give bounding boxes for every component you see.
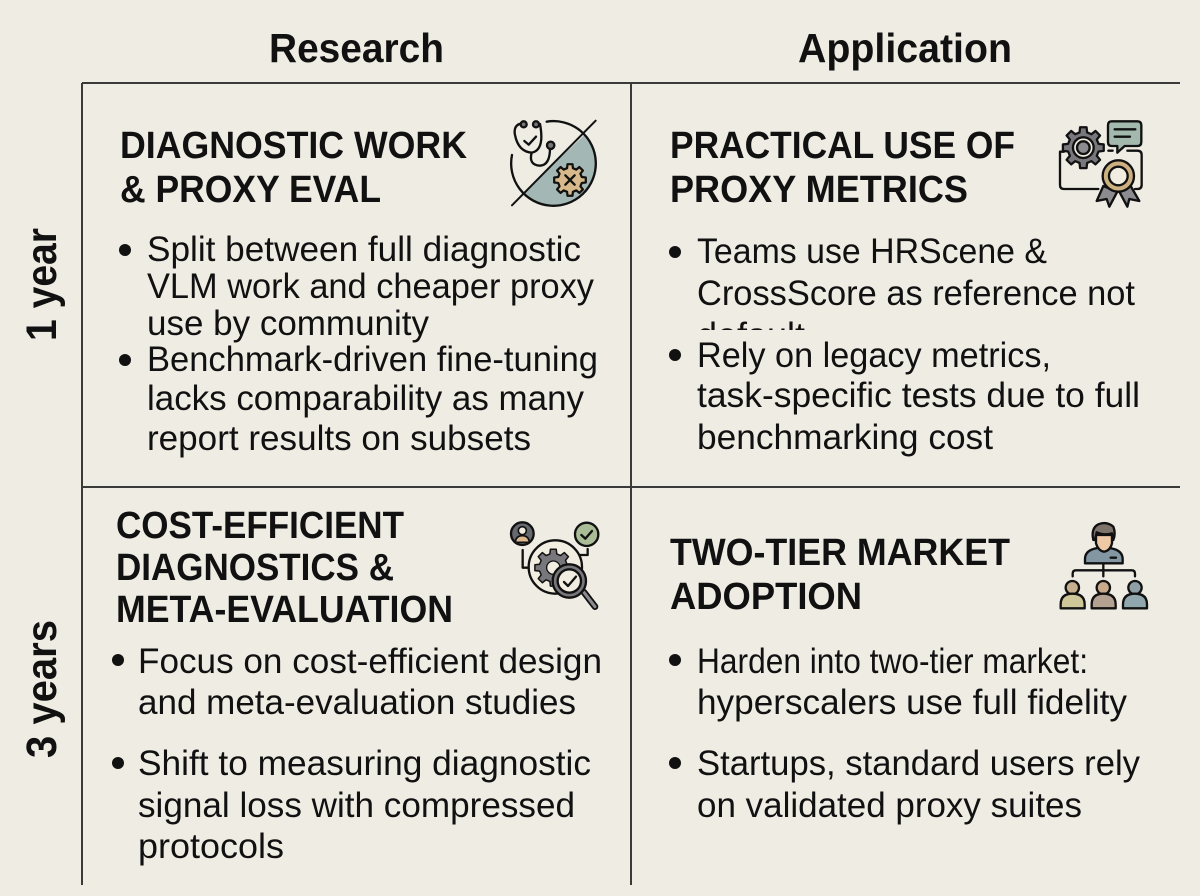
bullet list: lacks comparability as many xyxy=(147,379,584,418)
bullet list: signal loss with compressed xyxy=(138,786,575,825)
heading: cost-efficient diagnostics: META-EVALUATION xyxy=(116,589,453,631)
bullet list: report results on subsets xyxy=(147,419,531,458)
bullet list: benchmarking cost xyxy=(697,418,993,457)
heading: cost-efficient diagnostics: DIAGNOSTICS & xyxy=(116,547,394,589)
panel: application 3 years xyxy=(669,523,1147,825)
heading: two-tier market xyxy=(670,532,1010,618)
bullet list: Focus on cost-efficient design xyxy=(138,642,602,681)
bullet list: Startups, standard users rely xyxy=(697,744,1140,783)
heading: practical use: PROXY METRICS xyxy=(670,169,968,211)
bullet list: task-specific tests due to full xyxy=(697,376,1140,415)
bullet list xyxy=(669,232,1140,457)
heading: cost-efficient diagnostics xyxy=(116,505,453,631)
bullet list: and meta-evaluation studies xyxy=(138,683,576,722)
heading: diagnostic work: & PROXY EVAL xyxy=(120,169,381,211)
bullet list: CrossScore as reference not xyxy=(697,274,1135,313)
icon: gear, speech bubble and ribbon xyxy=(1060,121,1142,207)
heading: practical use xyxy=(670,125,1015,211)
bullet list xyxy=(112,642,602,866)
heading: practical use: PRACTICAL USE OF xyxy=(670,125,1015,167)
bullet list: Shift to measuring diagnostic xyxy=(138,744,591,783)
bullet list: protocols xyxy=(138,827,284,866)
column heading: Application: Application xyxy=(798,25,1012,71)
bullet list: Rely on legacy metrics, xyxy=(697,336,1051,375)
icon: gear under magnifier xyxy=(511,522,598,607)
icon: org chart of people xyxy=(1061,523,1147,608)
bullet list: on validated proxy suites xyxy=(697,786,1082,825)
panel: research 3 years xyxy=(112,505,602,866)
bullet list xyxy=(119,230,598,458)
bullet list: use by community xyxy=(147,304,429,343)
column heading: Research: Research xyxy=(269,25,444,71)
panel: research 1 year xyxy=(119,121,598,458)
icon: stethoscope and gear xyxy=(511,121,597,206)
row label: 3 years: 3 years xyxy=(18,620,66,758)
bullet list: Benchmark-driven fine-tuning xyxy=(147,340,598,379)
bullet list: VLM work and cheaper proxy xyxy=(147,267,594,306)
bullet list: default xyxy=(697,316,805,355)
heading: two-tier market: ADOPTION xyxy=(670,576,862,618)
panel: application 1 year xyxy=(669,121,1142,457)
bullet list: Teams use HRScene & xyxy=(697,232,1047,271)
bullet list xyxy=(669,642,1140,825)
row label: 1 year: 1 year xyxy=(18,228,66,341)
bullet list: Split between full diagnostic xyxy=(147,230,581,269)
heading: diagnostic work xyxy=(120,125,468,211)
heading: diagnostic work: DIAGNOSTIC WORK xyxy=(120,125,468,167)
bullet list: hyperscalers use full fidelity xyxy=(697,683,1127,722)
heading: cost-efficient diagnostics: COST-EFFICIENT xyxy=(116,505,404,547)
heading: two-tier market: TWO-TIER MARKET xyxy=(670,532,1010,574)
bullet list: Harden into two-tier market: xyxy=(697,642,1088,681)
